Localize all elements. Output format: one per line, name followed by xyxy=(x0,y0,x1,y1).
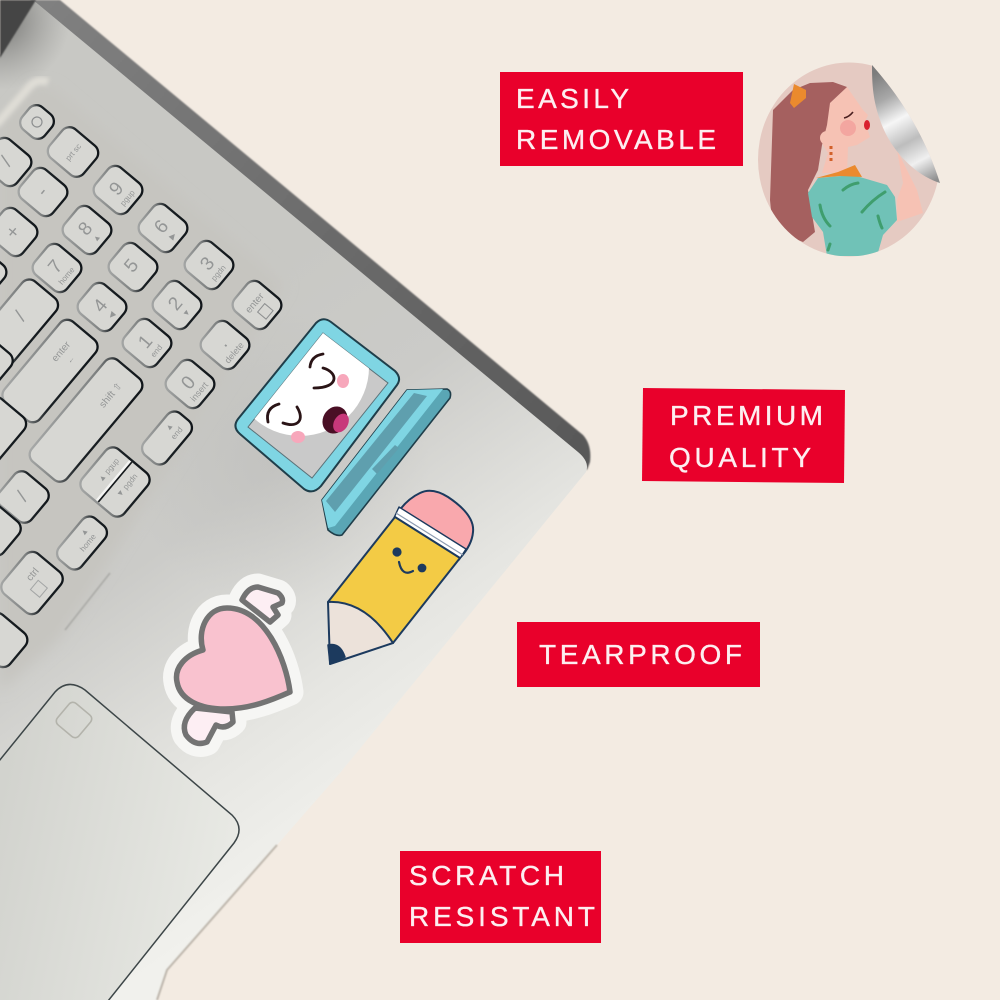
key 9 xyxy=(90,162,146,218)
left partial key middle xyxy=(0,332,17,392)
die cut white border xyxy=(177,587,290,743)
keyboard panel xyxy=(326,393,427,512)
label: scratch resistant xyxy=(400,851,601,943)
sticker: laptop with kawaii face xyxy=(231,298,451,535)
label: easily removable: REMOVABLE xyxy=(516,124,716,155)
plus key: + xyxy=(2,221,25,243)
minus key: - xyxy=(33,183,53,201)
label: premium quality: PREMIUM xyxy=(670,400,823,431)
home arrow key: home xyxy=(78,532,98,553)
dress folds xyxy=(820,183,885,250)
key 7 xyxy=(29,240,85,296)
pencil right eye xyxy=(418,564,426,572)
sticker laptop screen frame xyxy=(235,319,399,491)
key 6: 6 xyxy=(150,216,173,238)
kawaii eyes xyxy=(267,354,334,425)
laptop xyxy=(0,0,590,1000)
hair xyxy=(770,82,847,242)
pencil body xyxy=(328,517,460,643)
ear xyxy=(820,131,826,144)
blush upper xyxy=(337,374,349,388)
removed corner of disc xyxy=(872,58,950,190)
key 3: 3 xyxy=(196,253,219,275)
plus key xyxy=(0,204,41,260)
touchpad xyxy=(372,445,399,474)
laptop body xyxy=(0,0,587,1000)
key 4: ◀ xyxy=(106,309,118,320)
end arrow key: ▲ xyxy=(163,421,175,433)
keyboard keys xyxy=(0,101,285,671)
key 0 xyxy=(162,356,218,412)
sticker laptop screen xyxy=(248,333,388,478)
corner shading xyxy=(0,0,100,130)
delete key: . xyxy=(213,334,232,352)
label: scratch resistant: RESISTANT xyxy=(409,901,595,932)
top wing xyxy=(242,587,282,622)
girl illustration xyxy=(770,82,923,256)
sticker laptop base xyxy=(322,389,451,535)
cheek blush xyxy=(840,120,856,136)
neck and face xyxy=(820,87,870,173)
pencil left eye xyxy=(392,547,402,557)
base side xyxy=(322,389,451,535)
key 2: ▼ xyxy=(181,307,193,319)
bottom wing xyxy=(184,708,233,743)
raised arm xyxy=(897,150,923,222)
key 9: pgup xyxy=(118,188,137,208)
key 2: 2 xyxy=(164,293,187,315)
end arrow key: end xyxy=(169,425,185,441)
prt sc key: prt sc xyxy=(64,142,83,163)
slash key xyxy=(0,134,35,190)
key 9: 9 xyxy=(105,178,128,200)
key 2 xyxy=(149,277,205,333)
key 1: end xyxy=(149,343,164,359)
key 1: 1 xyxy=(134,331,157,353)
laptop dark corner xyxy=(0,0,36,58)
heart xyxy=(177,608,290,709)
label: easily removable: EASILY xyxy=(516,83,629,114)
sticker: smiling pencil xyxy=(328,491,473,664)
hair scrunchie xyxy=(790,84,806,108)
dress collar xyxy=(816,165,862,178)
numeric enter key: enter xyxy=(244,291,267,316)
numeric enter key xyxy=(229,277,285,333)
home arrow key xyxy=(53,513,111,573)
label: premium quality: QUALITY xyxy=(669,442,811,473)
key 4: 4 xyxy=(89,295,113,317)
blush lower xyxy=(291,431,305,443)
peeled silver backing xyxy=(872,65,940,183)
label: easily removable xyxy=(500,72,743,166)
key 6: ▶ xyxy=(167,230,179,241)
key 4 xyxy=(74,279,130,335)
base deck xyxy=(322,389,443,528)
fingerprint reader xyxy=(54,700,94,740)
main enter key: ← xyxy=(65,354,77,366)
prt sc key xyxy=(44,123,102,181)
key 7: home xyxy=(57,265,77,287)
lips xyxy=(864,120,870,130)
ferrule centre line xyxy=(396,513,463,555)
main enter key xyxy=(0,316,101,426)
left partial key lower xyxy=(0,393,30,471)
label: scratch resistant: SCRATCH xyxy=(409,860,564,891)
pgup and pgdn keys: ▼ pgdn xyxy=(115,472,139,499)
pencil lead xyxy=(328,644,345,664)
pencil ferrule stripes xyxy=(393,507,466,560)
laptop dark rear edge xyxy=(30,0,590,470)
pencil smile xyxy=(399,562,413,573)
recess shadow line xyxy=(65,573,110,630)
key 3: pgdn xyxy=(209,263,228,283)
power key xyxy=(16,101,58,143)
backslash key: / xyxy=(13,487,33,505)
sticker: winged heart xyxy=(177,587,290,743)
closed eye xyxy=(844,112,853,118)
key 0: 0 xyxy=(177,372,200,394)
minus key xyxy=(15,164,71,220)
earring xyxy=(830,146,832,162)
key 7: 7 xyxy=(44,256,67,278)
keyboard recess xyxy=(0,85,285,690)
eraser xyxy=(395,491,473,558)
label: premium quality xyxy=(642,388,845,483)
tongue xyxy=(330,411,352,435)
bottom left partial key xyxy=(0,609,31,671)
pgup and pgdn keys xyxy=(77,444,153,520)
key 6 xyxy=(135,200,191,256)
end arrow key xyxy=(138,408,196,468)
key 5: 5 xyxy=(120,255,143,277)
shift key xyxy=(26,354,146,486)
left partial key xyxy=(0,276,62,368)
dress xyxy=(808,175,897,256)
white face area xyxy=(254,333,369,436)
main enter key: enter xyxy=(50,339,73,364)
label: tearproof xyxy=(517,622,760,687)
key 5 xyxy=(105,239,161,295)
shift key: shift ⇧ xyxy=(97,381,125,410)
recess bevel xyxy=(0,81,48,125)
left partial key upper xyxy=(0,244,10,300)
trackpad xyxy=(0,684,239,1000)
key 1 xyxy=(119,315,175,371)
home arrow key: ▲ xyxy=(78,526,90,538)
delete key xyxy=(197,317,253,373)
laptop body shading xyxy=(0,0,587,1000)
icon: peeling round sticker with girl xyxy=(758,58,950,256)
bottom edge shadow xyxy=(157,845,277,1000)
key 0: insert xyxy=(188,380,210,403)
pencil wood tip xyxy=(328,602,393,664)
delete key: delete xyxy=(222,340,246,365)
key 8: ▲ xyxy=(91,232,103,244)
left partial key bottom xyxy=(0,500,25,560)
mouth xyxy=(318,402,352,438)
sticker disc xyxy=(758,62,940,256)
key 3 xyxy=(181,237,237,293)
backslash key xyxy=(0,467,53,527)
key 8 xyxy=(59,202,115,258)
pgup and pgdn keys: ▲ pgup xyxy=(96,456,121,484)
label: tearproof: TEARPROOF xyxy=(539,639,742,670)
ctrl key xyxy=(0,548,67,618)
ctrl key: ctrl xyxy=(25,566,42,583)
left partial key: / xyxy=(11,307,31,325)
key 8: 8 xyxy=(74,218,97,240)
